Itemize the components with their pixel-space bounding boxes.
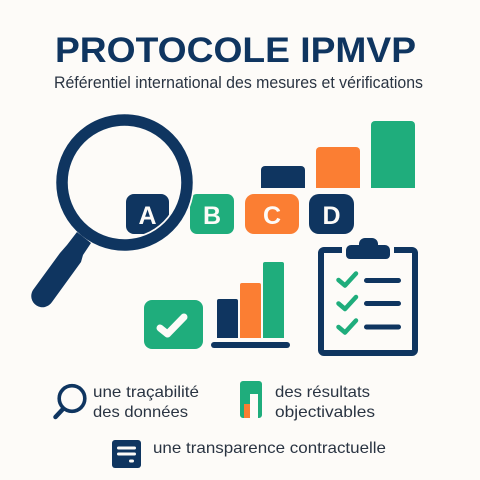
- tile: C: [245, 194, 299, 234]
- text: transparency: une transparence contractuelle: [153, 440, 386, 457]
- bar chart: [211, 262, 290, 348]
- tile: D: D: [322, 202, 341, 230]
- tile: B: B: [203, 202, 221, 230]
- tile: D: [309, 194, 354, 234]
- text: results: [275, 384, 375, 421]
- icon: document: [112, 440, 141, 468]
- text: traceability: des données: [93, 404, 188, 421]
- icon: small magnifier: [56, 386, 85, 417]
- tile: A: A: [138, 202, 157, 230]
- icon: small green bar: [240, 381, 262, 418]
- icon: large magnifying glass: [31, 120, 187, 307]
- text: traceability: une traçabilité: [93, 384, 199, 401]
- icon: clipboard checklist: [321, 238, 415, 353]
- icon: green check tile: [144, 300, 203, 349]
- text: results: objectivables: [275, 404, 375, 421]
- text: results: des résultats: [275, 384, 370, 401]
- tile: C: C: [263, 202, 281, 230]
- title: PROTOCOLE IPMVP: [55, 30, 416, 70]
- text: traceability: [93, 384, 199, 421]
- tile: B: [190, 194, 234, 234]
- tile: A: [126, 194, 169, 234]
- subtitle: Référentiel international des mesures et vérifications: [54, 74, 423, 92]
- ascending bars above tiles: [261, 121, 415, 188]
